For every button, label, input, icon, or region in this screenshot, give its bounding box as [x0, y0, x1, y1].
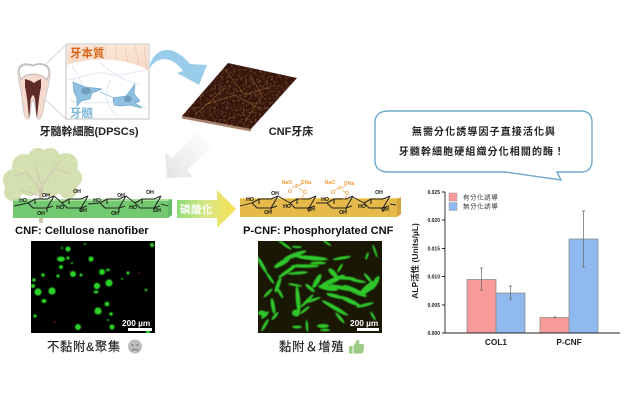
- molecule: phosphorylated cellulose chain: ONa: [344, 181, 354, 187]
- label: dentin: 牙本質: [70, 46, 104, 60]
- molecule: phosphorylated cellulose chain: [240, 180, 396, 216]
- label: P-CNF: P-CNF: Phosphorylated CNF: [243, 225, 394, 237]
- molecule: phosphorylated cellulose chain: HO: [358, 204, 366, 210]
- image: CNF sheet: [180, 60, 300, 132]
- molecule: cellulose chain: OH: [42, 193, 50, 199]
- tick labels: 0.010: [427, 274, 440, 280]
- molecule: phosphorylated cellulose chain: O: [288, 189, 292, 195]
- molecule: cellulose chain: HO: [129, 205, 137, 211]
- tick labels: 0.015: [427, 246, 440, 252]
- molecule: cellulose chain: OH: [111, 211, 119, 217]
- panel: tooth pulp close-up: [66, 44, 149, 120]
- callout text: 牙髓幹細胞硬組織分化相關的酶！: [399, 145, 565, 158]
- label: DPSCs: 牙髓幹細胞(DPSCs): [39, 124, 139, 138]
- molecule: cellulose chain: OH: [79, 208, 87, 214]
- callout text: 無需分化誘導因子直接活化與: [412, 125, 556, 138]
- molecule: phosphorylated cellulose chain: NaO: [325, 180, 335, 186]
- zoom lines: [46, 45, 66, 119]
- molecule: cellulose chain: OH: [153, 208, 161, 214]
- molecule: phosphorylated cellulose chain: OH: [375, 190, 383, 196]
- molecule: cellulose chain: OH: [146, 190, 154, 196]
- molecule: phosphorylated cellulose chain: OH: [307, 207, 315, 213]
- arrow: grey diagonal: [165, 132, 213, 178]
- label: phosphorylation: 磷酸化: [180, 203, 213, 216]
- molecule: phosphorylated cellulose chain: HO: [283, 204, 291, 210]
- molecule: phosphorylated cellulose chain: OH: [264, 210, 272, 216]
- legend: [449, 192, 498, 210]
- molecule: phosphorylated cellulose chain: O: [345, 191, 349, 197]
- label: CNF bed: CNF牙床: [269, 124, 313, 138]
- legend: 無分化誘導: [463, 202, 498, 210]
- callout text: [399, 125, 565, 158]
- label: adhesion and proliferation: 黏附＆增殖: [279, 339, 344, 354]
- molecule: phosphorylated cellulose chain: ONa: [301, 180, 311, 186]
- icon: sad face: [128, 340, 142, 354]
- axes: [442, 192, 620, 333]
- micrograph: CNF cells aggregated: [31, 241, 155, 334]
- cell: stem cell right: [113, 84, 142, 108]
- molecule: phosphorylated cellulose chain: NaO: [282, 180, 292, 186]
- molecule: phosphorylated cellulose chain: HO: [321, 197, 329, 203]
- molecule: phosphorylated cellulose chain: O: [331, 190, 335, 196]
- label: CNF: CNF: Cellulose nanofiber: [15, 225, 149, 237]
- tick labels: 0.025: [427, 190, 440, 196]
- scale bar: 200 µm: [350, 318, 378, 328]
- molecule: cellulose chain: HO: [93, 198, 101, 204]
- category labels: P-CNF: [556, 337, 582, 347]
- category labels: COL1: [485, 337, 507, 347]
- legend: 有分化誘導: [463, 192, 498, 202]
- substrate: CNF green bar: [13, 199, 172, 218]
- molecule: cellulose chain: OH: [37, 211, 45, 217]
- category labels: [485, 337, 582, 347]
- micrograph: P-CNF cells spread: [255, 239, 382, 333]
- arrow: phosphorylation: [177, 190, 236, 228]
- molecule: phosphorylated cellulose chain: P: [338, 186, 342, 192]
- icon: thumbs up: [349, 340, 364, 354]
- label: pulp: 牙髓: [70, 106, 93, 120]
- tick labels: 0.020: [427, 218, 440, 224]
- molecule: phosphorylated cellulose chain: OH: [271, 191, 279, 197]
- icon: tree: [3, 148, 82, 223]
- bar chart: [410, 190, 620, 347]
- arrow: curved blue: [149, 50, 207, 85]
- icon: tooth: [18, 64, 50, 119]
- tick labels: [427, 190, 440, 337]
- cell: stem cell left: [73, 82, 102, 106]
- molecule: phosphorylated cellulose chain: P: [295, 184, 299, 190]
- callout: [375, 111, 592, 180]
- axis title: ALP活性 (Units/µL): [410, 223, 420, 299]
- scale bar: 200 µm: [122, 318, 150, 328]
- molecule: cellulose chain: OH: [117, 193, 125, 199]
- molecule: phosphorylated cellulose chain: OH: [339, 210, 347, 216]
- molecule: phosphorylated cellulose chain: O: [303, 190, 307, 196]
- tick labels: 0.000: [427, 331, 440, 337]
- tick labels: 0.005: [427, 303, 440, 309]
- molecule: phosphorylated cellulose chain: OH: [381, 207, 389, 213]
- molecule: phosphorylated cellulose chain: HO: [246, 197, 254, 203]
- molecule: cellulose chain: HO: [19, 198, 27, 204]
- bars: [467, 239, 598, 333]
- substrate: P-CNF yellow bar: [240, 197, 401, 217]
- error bars: [480, 211, 585, 317]
- molecule: cellulose chain: [14, 189, 168, 217]
- molecule: cellulose chain: OH: [73, 189, 81, 195]
- molecule: cellulose chain: HO: [56, 205, 64, 211]
- label: no adhesion: 不黏附&聚集: [47, 339, 121, 354]
